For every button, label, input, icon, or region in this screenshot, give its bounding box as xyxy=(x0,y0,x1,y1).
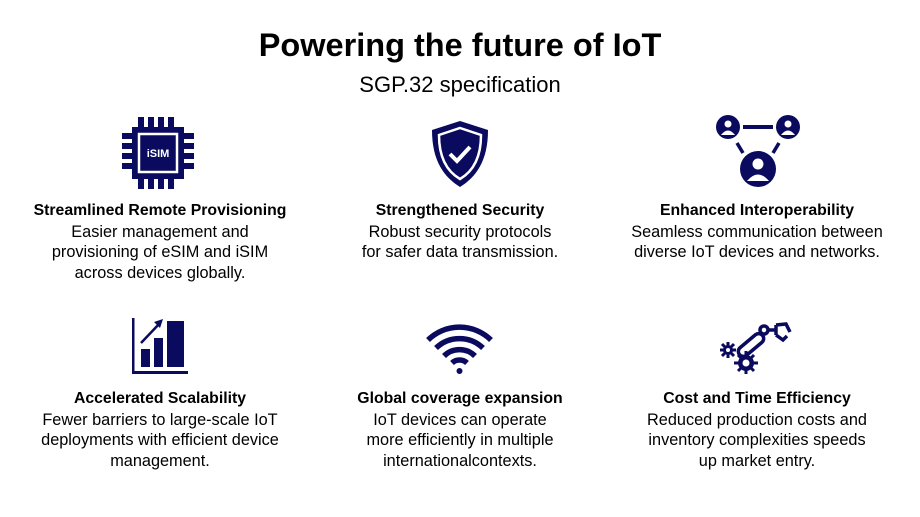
block: security: Strengthened Security xyxy=(376,202,544,219)
block: scalability: deployments with efficient device xyxy=(41,431,279,449)
block: scalability: management. xyxy=(110,452,210,470)
block: efficiency: Reduced production costs and xyxy=(647,410,867,428)
block: interoperability: diverse IoT devices and networks. xyxy=(634,243,880,261)
block: security: for safer data transmission. xyxy=(362,243,558,261)
icon: shield xyxy=(432,121,488,187)
block: scalability xyxy=(41,390,279,470)
block: security xyxy=(362,202,558,261)
icon: iSIM chip xyxy=(122,117,194,189)
block: provisioning: Streamlined Remote Provisioning xyxy=(34,202,286,219)
block: coverage: internationalcontexts. xyxy=(383,452,537,470)
block: interoperability: Enhanced Interoperability xyxy=(660,202,854,219)
icon: robot arm and gears xyxy=(720,322,792,374)
block: efficiency: Cost and Time Efficiency xyxy=(663,390,851,407)
block: coverage: IoT devices can operate xyxy=(373,410,547,428)
block: provisioning: Easier management and xyxy=(71,222,249,240)
icon: iSIM chip: iSIM xyxy=(147,148,169,160)
icon: wifi xyxy=(426,324,493,374)
block: coverage: Global coverage expansion xyxy=(357,390,563,407)
block: coverage xyxy=(357,390,563,470)
block: interoperability: Seamless communication between xyxy=(631,222,883,240)
block: efficiency: inventory complexities speeds xyxy=(648,431,866,449)
block: efficiency xyxy=(647,390,867,470)
block: interoperability xyxy=(631,202,883,261)
block: efficiency: up market entry. xyxy=(699,452,815,470)
block: security: Robust security protocols xyxy=(369,222,551,240)
block: scalability: Fewer barriers to large-scale IoT xyxy=(42,410,278,428)
block: scalability: Accelerated Scalability xyxy=(74,390,246,407)
icon: growth chart xyxy=(132,318,188,374)
block: provisioning: across devices globally. xyxy=(75,264,245,282)
title: Powering the future of IoT xyxy=(259,27,661,63)
block: coverage: more efficiently in multiple xyxy=(366,431,554,449)
block: provisioning: provisioning of eSIM and iSIM xyxy=(52,243,268,261)
subtitle: SGP.32 specification xyxy=(359,72,561,97)
icon: people network xyxy=(716,115,800,187)
block: provisioning xyxy=(34,202,286,282)
